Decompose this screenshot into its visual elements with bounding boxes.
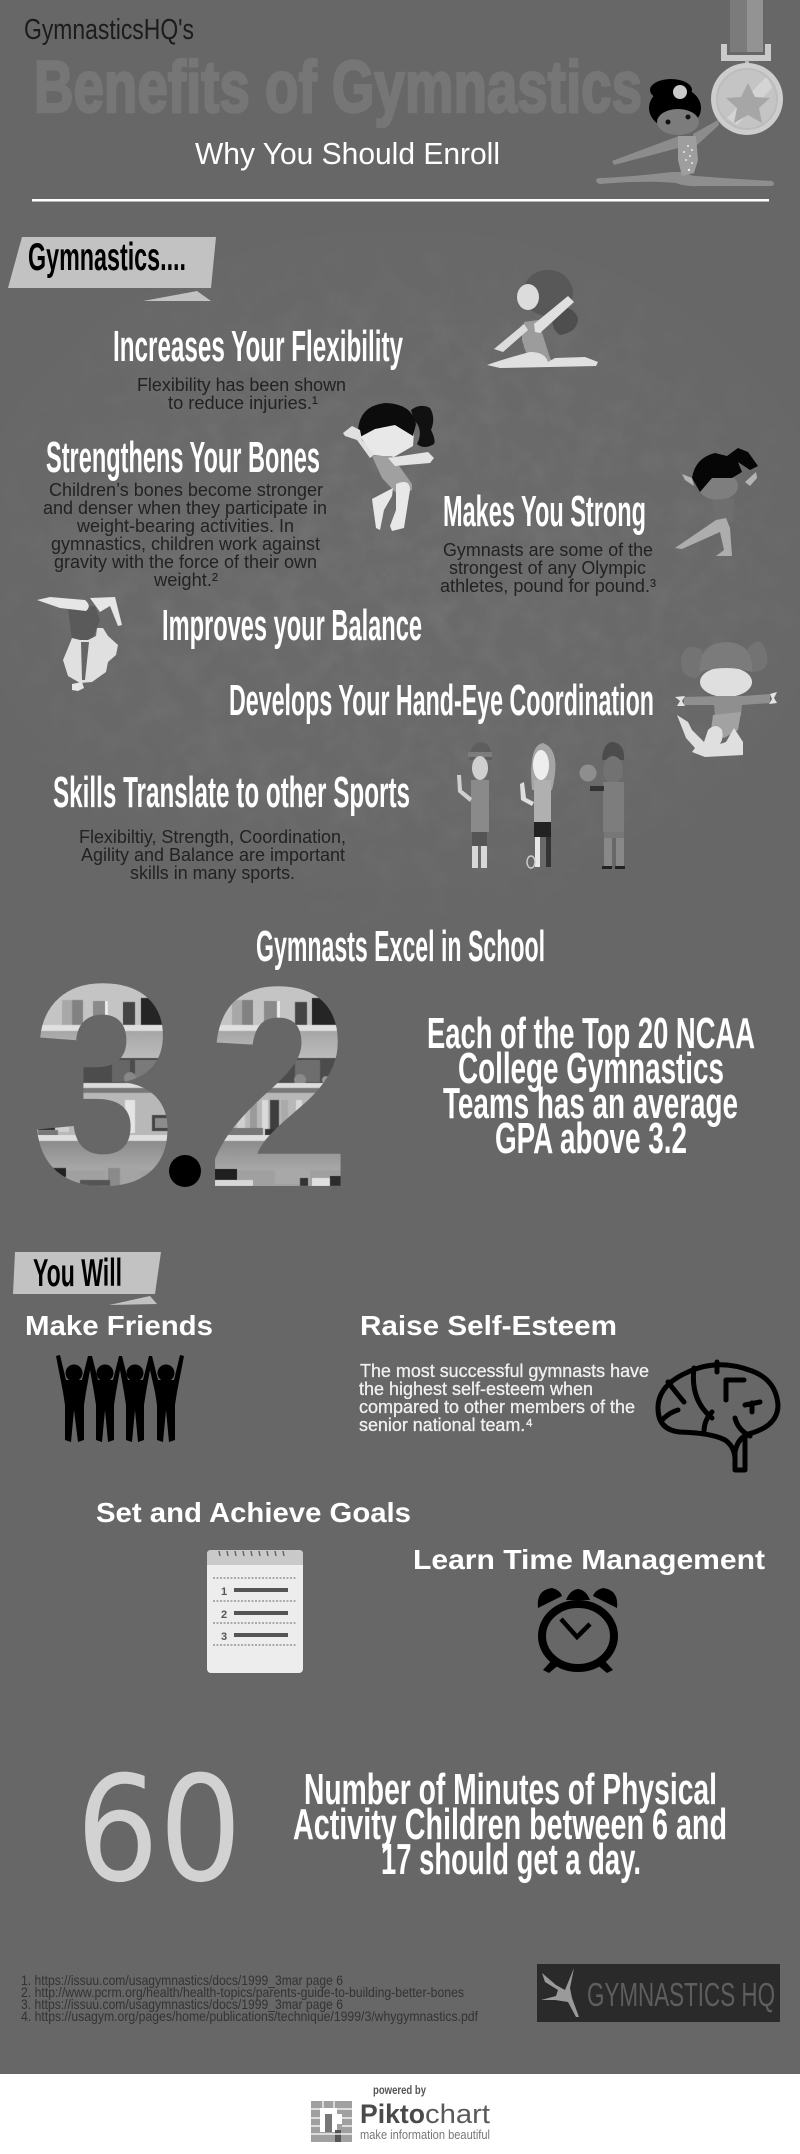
text: other sports	[79, 826, 346, 883]
big number 3.2	[31, 924, 351, 1247]
text: bones	[43, 479, 327, 590]
footnotes	[21, 1972, 478, 2024]
heading: bones: Strengthens Your Bones	[46, 433, 320, 482]
text: bones: weight.²	[153, 569, 218, 590]
icon: notepad checklist: 1	[221, 1586, 227, 1598]
heading: friends: Make Friends	[25, 1310, 213, 1341]
wordmark: Piktochart: Pikto	[360, 2099, 425, 2129]
text: activity statistic: 17 should get a day.	[381, 1835, 641, 1884]
ribbon: You Will	[13, 1252, 161, 1305]
subtitle: Why You Should Enroll	[195, 136, 500, 171]
ribbon: You Will: You Will	[33, 1252, 122, 1295]
background texture	[216, 432, 594, 677]
text: gpa statistic	[427, 1009, 755, 1163]
text: self-esteem: compared to other members of the	[359, 1396, 635, 1417]
wordmark: Piktochart	[360, 2099, 491, 2142]
text: other sports: skills in many sports.	[130, 862, 295, 883]
text: bones: gymnastics, children work against	[51, 533, 320, 554]
icon: brain	[658, 1362, 778, 1470]
heading: flexibility: Increases Your Flexibility	[113, 322, 403, 371]
text: self-esteem: The most successful gymnasts have	[360, 1360, 649, 1381]
icon: gymnast with ponytail	[343, 403, 435, 531]
text: strong: strongest of any Olympic	[449, 557, 646, 578]
header rule	[32, 199, 769, 202]
text: activity statistic	[293, 1765, 727, 1884]
wordmark: Piktochart: make information beautiful	[360, 2127, 490, 2142]
text: strong	[440, 539, 656, 596]
text: strong: athletes, pound for pound.³	[440, 575, 656, 596]
heading: balance: Improves your Balance	[162, 601, 422, 650]
icon: alarm clock	[538, 1588, 617, 1673]
text: strong: Gymnasts are some of the	[443, 539, 653, 560]
heading: other sports: Skills Translate to other Sports	[53, 768, 410, 817]
icon: gymnast splits with medal	[596, 79, 774, 186]
footnotes: 1. https://issuu.com/usagymnastics/docs/1999_3mar page 6	[21, 1972, 343, 1988]
logo: Gymnastics HQ	[537, 1964, 780, 2022]
text: flexibility: to reduce injuries.¹	[168, 392, 318, 413]
text: other sports: Agility and Balance are important	[81, 844, 345, 865]
big number 60: 60	[76, 1745, 242, 1915]
text: flexibility: Flexibility has been shown	[137, 374, 346, 395]
text: bones: gravity with the force of their own	[54, 551, 317, 572]
footnotes: 3. https://issuu.com/usagymnastics/docs/1999_3mar page 6	[21, 1996, 343, 2012]
text: self-esteem: the highest self-esteem when	[359, 1378, 593, 1399]
ribbon: Gymnastics	[8, 236, 216, 301]
icon: piktochart mark	[311, 2101, 352, 2142]
big number 3.2: 3	[31, 924, 177, 1244]
text: self-esteem: senior national team.⁴	[359, 1414, 533, 1435]
ribbon: Gymnastics: Gymnastics....	[28, 236, 186, 279]
icon: notepad checklist	[207, 1550, 303, 1673]
heading: time management: Learn Time Management	[413, 1544, 765, 1575]
footnotes: 2. http://www.pcrm.org/health/health-topics/parents-guide-to-building-better-bones	[21, 1984, 464, 2000]
footnotes: 4. https://usagym.org/pages/home/publications/technique/1999/3/whygymnastics.pdf	[21, 2008, 478, 2024]
text: bones: and denser when they participate in	[43, 497, 327, 518]
icon: inverted gymnast	[37, 597, 122, 691]
icon: notepad checklist: 2	[221, 1609, 227, 1621]
brand line: GymnasticsHQ's	[24, 14, 194, 46]
powered by label: powered by	[373, 2085, 426, 2097]
icon: gymnast with pigtails	[675, 641, 777, 757]
icon: kneeling gymnast	[487, 270, 598, 368]
icon: medal	[711, 0, 783, 135]
text: other sports: Flexibiltiy, Strength, Coordination,	[79, 826, 346, 847]
text: flexibility	[137, 374, 346, 413]
icon: notepad checklist: 3	[221, 1631, 227, 1643]
text: bones: Children’s bones become stronger	[49, 479, 323, 500]
big number 3.2: 2	[206, 927, 351, 1247]
icon: gymnast leaning	[675, 448, 758, 556]
text: self-esteem	[359, 1360, 649, 1435]
icon: people group	[56, 1355, 184, 1442]
text: gpa statistic: GPA above 3.2	[495, 1114, 687, 1163]
icon: three athletes	[457, 742, 625, 869]
heading: goals: Set and Achieve Goals	[96, 1497, 411, 1528]
heading: school: Gymnasts Excel in School	[256, 922, 545, 971]
wordmark: Piktochart: chart	[425, 2099, 491, 2129]
footer	[0, 2074, 800, 2154]
heading: self-esteem: Raise Self-Esteem	[360, 1310, 617, 1341]
text: bones: weight-bearing activities. In	[76, 515, 294, 536]
